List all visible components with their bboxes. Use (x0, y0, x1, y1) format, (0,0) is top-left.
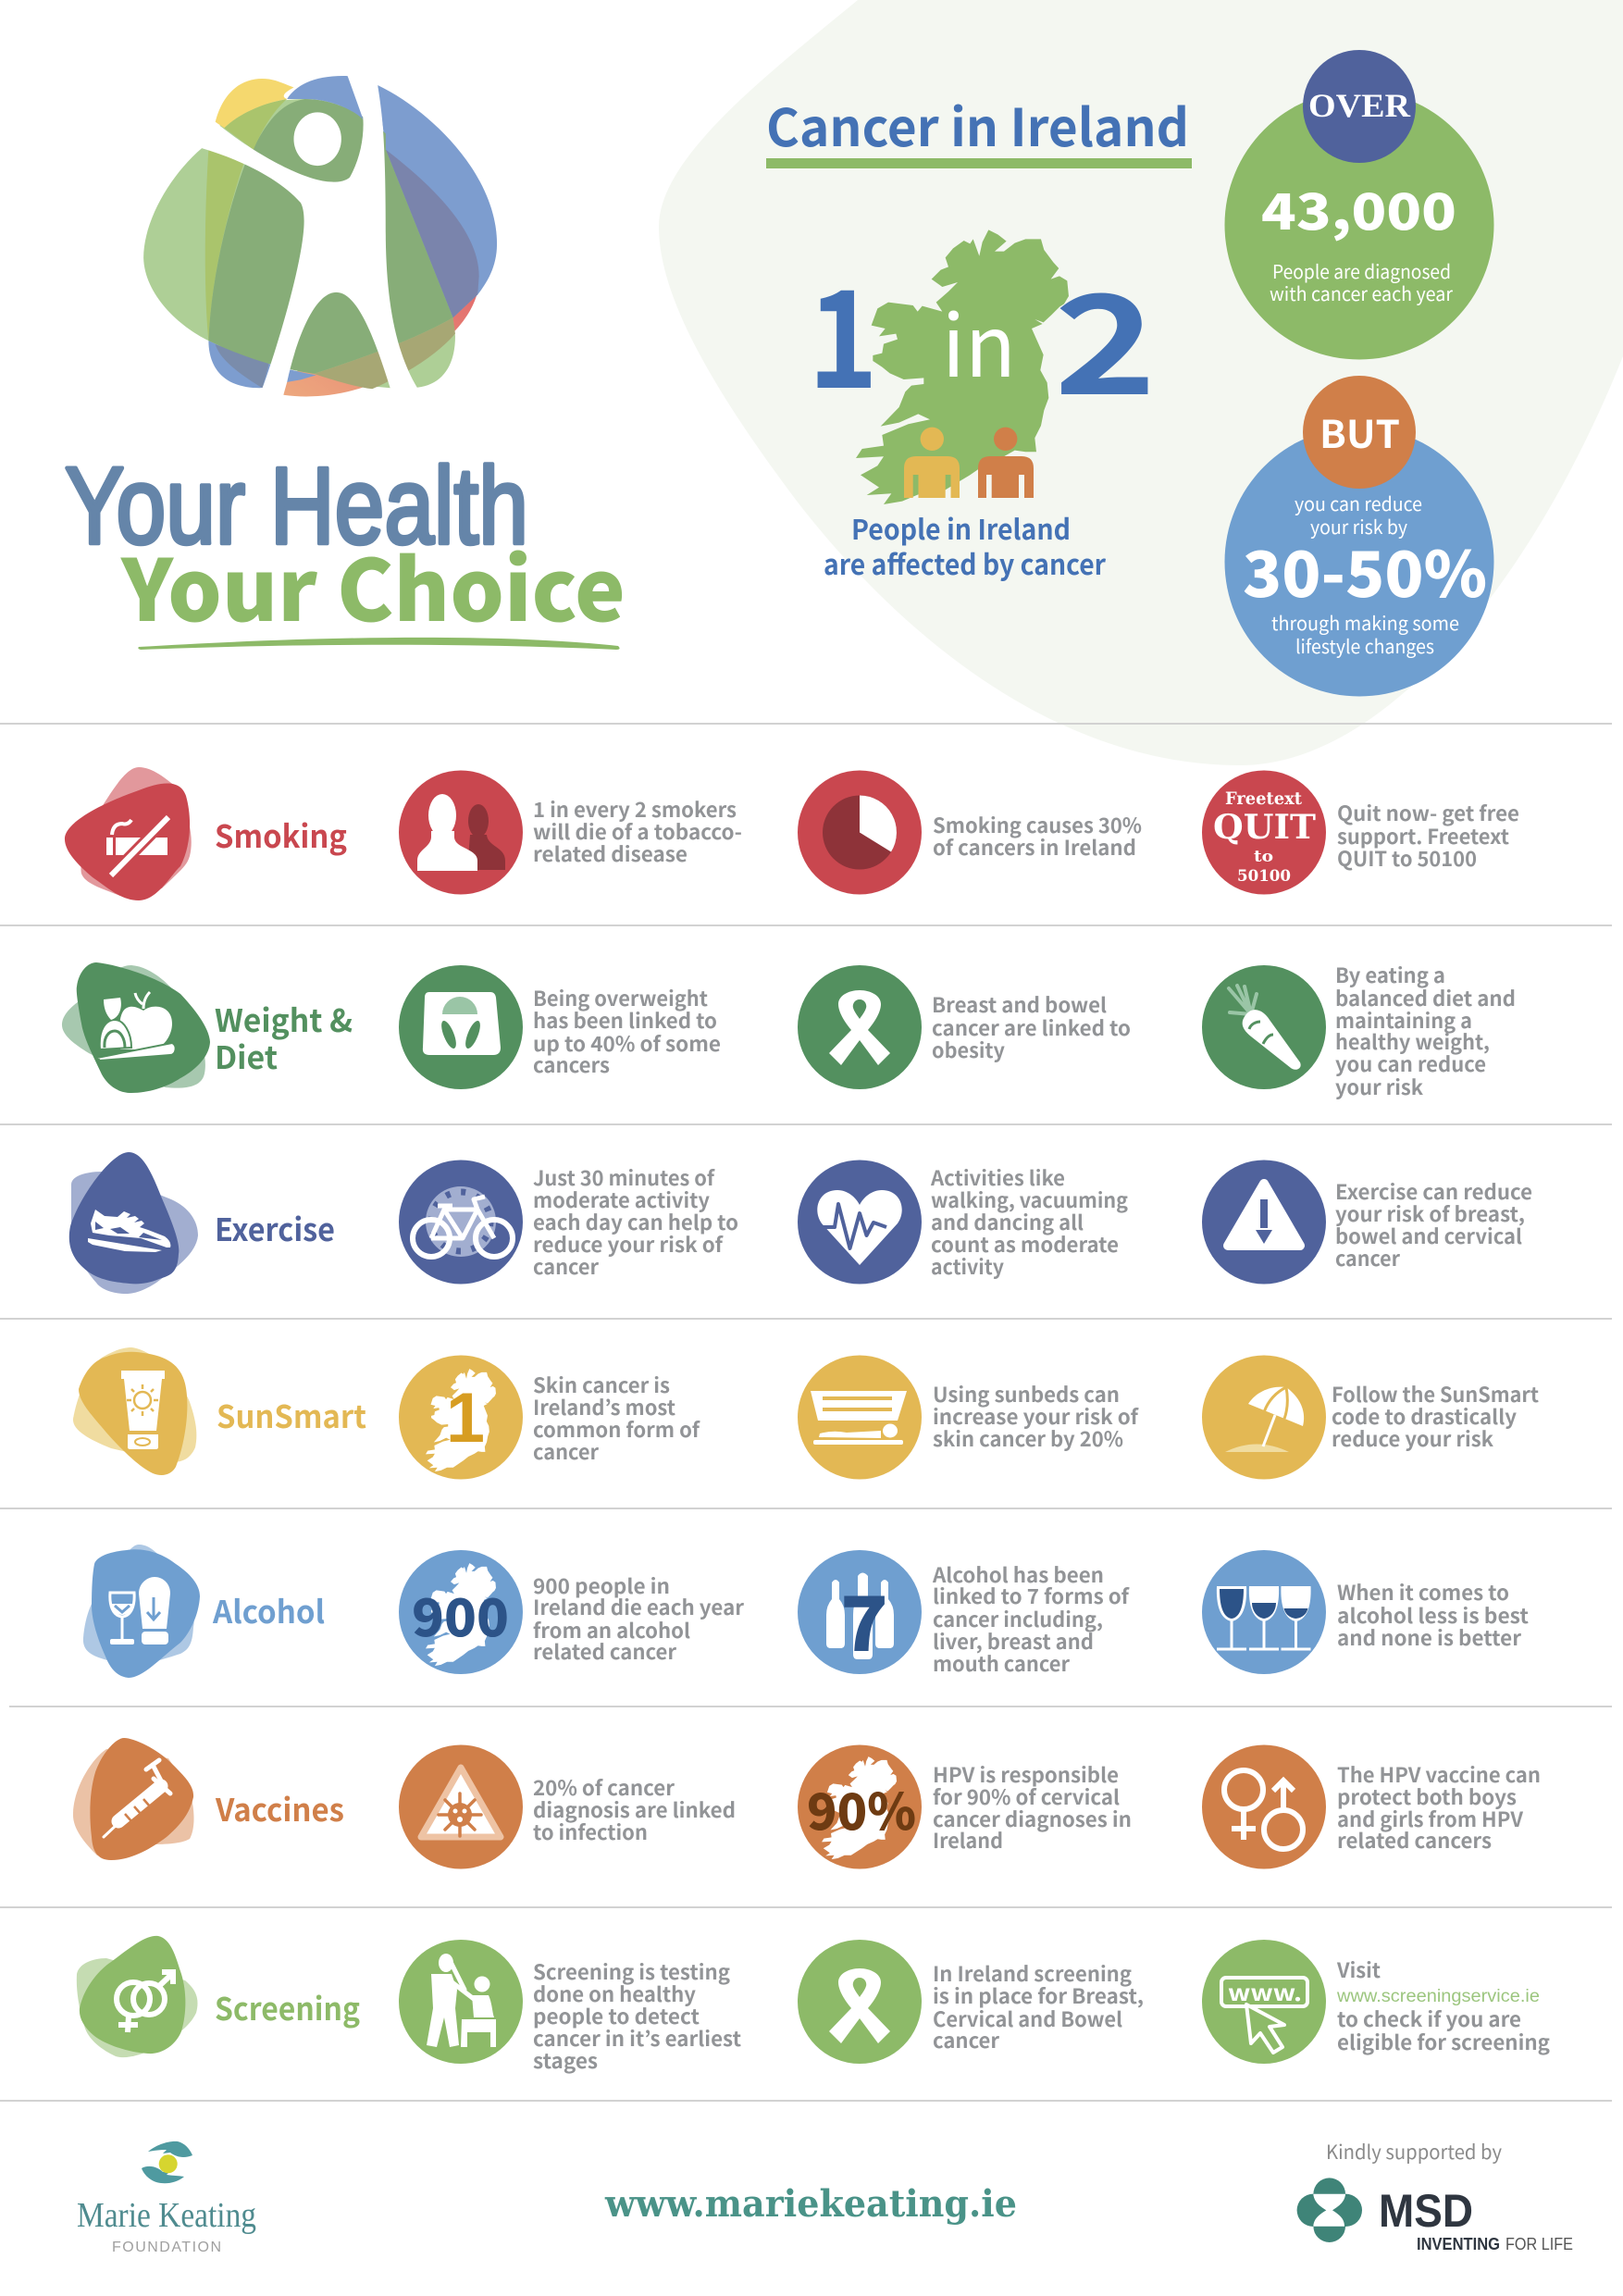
icon: ireland 900 (399, 1550, 523, 1674)
icon: heart with pulse (798, 1160, 922, 1285)
heading: exercise: Exercise (215, 1205, 335, 1250)
badge: freetext quit: QUIT (1213, 808, 1316, 847)
text: 7 forms: linked to 7 forms of (933, 1581, 1130, 1610)
text: less is best: When it comes to (1337, 1577, 1509, 1607)
text: screening in ireland: In Ireland screening (933, 1958, 1132, 1988)
badge: freetext quit: to (1254, 848, 1273, 866)
icon: gender blob (77, 1936, 198, 2057)
text: 900 people: Ireland die each year (533, 1592, 744, 1621)
text: balanced diet: balanced diet and (1335, 983, 1516, 1012)
text: 30 minutes: Just 30 minutes of (533, 1162, 715, 1192)
text: follow sunsmart: reduce your risk (1332, 1423, 1494, 1453)
logo: marie keating foundation (77, 2141, 256, 2255)
text: quit now: support. Freetext (1337, 821, 1509, 850)
text: screening testing: Screening is testing (533, 1956, 730, 1986)
chart: 30% pie (798, 770, 922, 894)
text: 7 forms: cancer including, (933, 1604, 1103, 1633)
text: overweight: Being overweight (533, 983, 708, 1012)
callout: but 30-50%: 30-50% (1243, 524, 1487, 615)
text: follow sunsmart: Follow the SunSmart (1332, 1379, 1539, 1409)
sponsor: kindly supported by msd (1297, 2138, 1573, 2253)
icon: drinks blob (83, 1545, 200, 1678)
logo: marie keating foundation: Marie Keating (77, 2196, 256, 2235)
1 in 2 stat with ireland map: 2 (1054, 234, 1157, 434)
sponsor: kindly supported by msd: INVENTING (1417, 2235, 1500, 2253)
icon: gender symbols (1202, 1745, 1326, 1869)
heading: weight and diet: Weight & (215, 996, 353, 1041)
text: hpv vaccine: and girls from HPV (1337, 1804, 1523, 1833)
text: 7 forms: mouth cancer (933, 1648, 1070, 1678)
text: smoking causes: of cancers in Ireland (933, 832, 1136, 862)
panel: alcohol row (83, 1545, 1529, 1678)
1 in 2 stat with ireland map: 1 (808, 232, 878, 428)
text: 30 minutes: each day can help to (533, 1207, 738, 1236)
text: 20% infection: to infection (533, 1817, 648, 1846)
1 in 2 stat with ireland map: in (942, 279, 1016, 402)
text: breast and bowel: obesity (932, 1035, 1005, 1064)
text: hpv responsible: cancer diagnoses in (933, 1804, 1132, 1833)
text: hpv responsible: for 90% of cervical (933, 1781, 1120, 1811)
icon: sunscreen blob (73, 1347, 196, 1475)
text: smokers stat: will die of a tobacco- (533, 816, 742, 846)
panel: exercise row (69, 1152, 1532, 1294)
text: 900 people (533, 1570, 744, 1666)
panel: weight and diet row (62, 960, 1516, 1101)
text: 20% infection: diagnosis are linked (533, 1794, 736, 1824)
text: less is best: and none is better (1337, 1622, 1521, 1652)
text: screening in ireland: Cervical and Bowel (933, 2004, 1122, 2033)
icon: virus warning (399, 1745, 523, 1869)
text: activities (930, 1162, 1128, 1281)
text: 7 forms: liver, breast and (933, 1626, 1094, 1656)
text: screening testing: cancer in it’s earliest (533, 2023, 741, 2053)
text: quit now (1337, 798, 1519, 873)
heading: weight and diet (215, 996, 353, 1078)
callout: but 30-50%: you can reduce (1295, 489, 1422, 516)
text: visit screeningservice: eligible for screening (1337, 2027, 1550, 2056)
callout: over 43,000: 43,000 (1261, 171, 1456, 244)
callout: but 30-50%: lifestyle changes (1295, 631, 1434, 659)
text: quit now: Quit now- get free (1337, 798, 1519, 827)
text: skin cancer: cancer (533, 1436, 599, 1466)
heading: cancer in ireland: Cancer in Ireland (766, 87, 1189, 162)
text: 7 forms (932, 1559, 1130, 1678)
icon: warning triangle (1202, 1160, 1326, 1285)
callout: but 30-50%: your risk by (1310, 512, 1407, 540)
text: sunbeds: skin cancer by 20% (933, 1423, 1123, 1453)
text: screening in ireland: is in place for Breast, (933, 1980, 1144, 2010)
text: sunbeds: increase your risk of (933, 1401, 1139, 1431)
text: screening testing: people to detect (533, 2001, 700, 2030)
heading: screening: Screening (215, 1984, 360, 2029)
callout: over 43,000: People are diagnosed (1272, 256, 1451, 284)
text: visit screeningservice (1336, 1955, 1550, 2056)
footer url: www.mariekeating.ie (604, 2182, 1017, 2226)
callout: over 43,000 (1225, 50, 1493, 359)
heading: weight and diet: Diet (215, 1033, 278, 1078)
icon: ireland 900: 900 (412, 1577, 509, 1652)
text: balanced diet: By eating a (1335, 960, 1445, 989)
background blob (659, 0, 1623, 765)
text: overweight: cancers (533, 1049, 610, 1079)
icon: weighing scale (399, 965, 523, 1089)
icon: sunbed (798, 1355, 922, 1479)
text: balanced diet (1335, 960, 1516, 1101)
icon: ireland 90% (798, 1745, 922, 1869)
text: sunbeds (933, 1379, 1139, 1453)
callout: over 43,000: OVER (1308, 87, 1411, 124)
text: 30 minutes: cancer (533, 1251, 599, 1281)
title: your health your choice: Your Health (65, 445, 528, 567)
text: overweight: has been linked to (533, 1005, 717, 1035)
icon: ireland 90%: 90% (807, 1771, 916, 1844)
text: exercise reduce: cancer (1335, 1243, 1400, 1272)
text: exercise reduce: Exercise can reduce (1335, 1176, 1532, 1206)
heading: alcohol: Alcohol (212, 1587, 325, 1632)
sponsor: kindly supported by msd: MSD (1379, 2185, 1473, 2237)
icon: syringe blob (73, 1738, 194, 1860)
caption: people in ireland (824, 507, 1107, 583)
text: follow sunsmart: code to drastically (1332, 1401, 1517, 1431)
text: skin cancer: Ireland’s most (533, 1392, 675, 1421)
text: smokers stat: related disease (533, 838, 688, 868)
icon: doctor and patient (399, 1940, 523, 2064)
icon: ribbon (798, 965, 922, 1089)
title: your health your choice: Your Choice (120, 523, 626, 646)
text: 30 minutes (533, 1162, 738, 1281)
text: activities: count as moderate (931, 1229, 1119, 1259)
text: exercise reduce: your risk of breast, (1335, 1198, 1525, 1228)
icon: trainer blob (69, 1152, 198, 1294)
sponsor: kindly supported by msd: Kindly supported by (1326, 2138, 1502, 2166)
text: visit screeningservice: www.screeningservice.ie (1336, 1987, 1540, 2006)
text: smokers stat: 1 in every 2 smokers (533, 794, 737, 824)
callout: but 30-50%: BUT (1319, 403, 1400, 459)
text: 900 people: from an alcohol (533, 1615, 690, 1644)
text: hpv responsible: HPV is responsible (933, 1759, 1119, 1789)
text: screening testing (533, 1956, 741, 2075)
text: screening testing: done on healthy (533, 1979, 696, 2008)
badge: freetext quit: Freetext (1225, 788, 1302, 809)
icon: ribbon (798, 1940, 922, 2064)
caption: people in ireland: People in Ireland (851, 507, 1071, 548)
icon: www cursor: www. (1228, 1975, 1302, 2007)
text: less is best (1337, 1577, 1529, 1652)
text: hpv vaccine: protect both boys (1337, 1781, 1517, 1811)
icon: ireland number 1 (399, 1355, 523, 1479)
text: exercise reduce: bowel and cervical (1335, 1221, 1522, 1250)
text: sunbeds: Using sunbeds can (933, 1379, 1120, 1409)
icon: bottles with 7: 7 (840, 1563, 888, 1673)
text: balanced diet: your risk (1335, 1072, 1424, 1101)
text: breast and bowel (932, 989, 1131, 1064)
text: 7 forms: Alcohol has been (932, 1559, 1104, 1589)
1 in 2 stat with ireland map (808, 230, 1157, 504)
text: balanced diet: healthy weight, (1335, 1026, 1490, 1056)
text: screening testing: stages (533, 2045, 598, 2075)
callout: over 43,000: with cancer each year (1270, 279, 1453, 306)
text: breast and bowel: cancer are linked to (932, 1012, 1131, 1042)
icon: three wine glasses (1202, 1550, 1326, 1674)
text: exercise reduce (1335, 1176, 1532, 1272)
text: hpv vaccine (1337, 1759, 1541, 1855)
text: overweight: up to 40% of some (533, 1028, 721, 1058)
panel: screening row (77, 1936, 1550, 2075)
text: 20% infection (533, 1772, 736, 1846)
icon: beach umbrella (1202, 1355, 1326, 1479)
sponsor: kindly supported by msd: FOR LIFE (1505, 2235, 1573, 2253)
caption: people in ireland: are affected by cancer (824, 542, 1107, 583)
text: screening in ireland (933, 1958, 1144, 2054)
badge: freetext quit (1202, 770, 1326, 894)
logo: marie keating foundation: FOUNDATION (112, 2240, 221, 2255)
icon: two silhouettes (399, 770, 523, 894)
heading: smoking: Smoking (215, 812, 347, 857)
icon: www cursor (1202, 1940, 1326, 2064)
text: smokers stat (533, 794, 742, 868)
heading: sunsmart: SunSmart (217, 1392, 366, 1437)
text: follow sunsmart (1332, 1379, 1539, 1453)
text: breast and bowel: Breast and bowel (932, 989, 1107, 1019)
text: hpv responsible (933, 1759, 1132, 1855)
text: quit now: QUIT to 50100 (1337, 843, 1477, 873)
text: less is best: alcohol less is best (1337, 1600, 1529, 1630)
text: activities: activity (931, 1251, 1004, 1281)
logo: figure in coloured shapes (143, 69, 497, 410)
icon: ireland number 1: 1 (446, 1379, 485, 1458)
text: smoking causes (933, 810, 1142, 862)
icon: food blob (62, 962, 210, 1093)
icon: bottles with 7 (798, 1550, 922, 1674)
text: balanced diet: maintaining a (1335, 1005, 1472, 1035)
text: visit screeningservice: to check if you are (1337, 2004, 1521, 2033)
text: 900 people: related cancer (533, 1636, 676, 1666)
heading: vaccines: Vaccines (215, 1785, 344, 1831)
text: activities: walking, vacuuming (931, 1185, 1128, 1214)
text: visit screeningservice: Visit (1336, 1955, 1381, 1984)
text: skin cancer: common form of (533, 1414, 700, 1444)
text: smoking causes: Smoking causes 30% (933, 810, 1142, 839)
text: 20% infection: 20% of cancer (533, 1772, 675, 1802)
title: your health your choice (65, 445, 626, 650)
text: 30 minutes: reduce your risk of (533, 1229, 724, 1259)
text: overweight (533, 983, 721, 1079)
text: screening in ireland: cancer (933, 2025, 999, 2054)
panel: sunsmart row (73, 1347, 1539, 1479)
icon: no smoking blob (65, 767, 192, 900)
panel: smoking row (65, 767, 1519, 900)
icon: clock and bicycle (399, 1160, 523, 1285)
text: activities: and dancing all (931, 1207, 1084, 1236)
text: hpv vaccine: The HPV vaccine can (1337, 1759, 1541, 1789)
text: skin cancer (533, 1370, 700, 1466)
panel: vaccines row (73, 1738, 1541, 1869)
text: activities: Activities like (930, 1162, 1065, 1192)
text: hpv responsible: Ireland (933, 1825, 1003, 1855)
text: skin cancer: Skin cancer is (533, 1370, 670, 1399)
callout: but 30-50%: through making some (1271, 608, 1459, 636)
callout: but 30-50% (1225, 376, 1493, 696)
icon: carrot (1202, 965, 1326, 1089)
text: hpv vaccine: related cancers (1337, 1825, 1492, 1855)
text: 900 people: 900 people in (533, 1570, 670, 1600)
badge: freetext quit: 50100 (1237, 867, 1291, 886)
text: 30 minutes: moderate activity (533, 1185, 710, 1214)
text: balanced diet: you can reduce (1335, 1049, 1486, 1078)
